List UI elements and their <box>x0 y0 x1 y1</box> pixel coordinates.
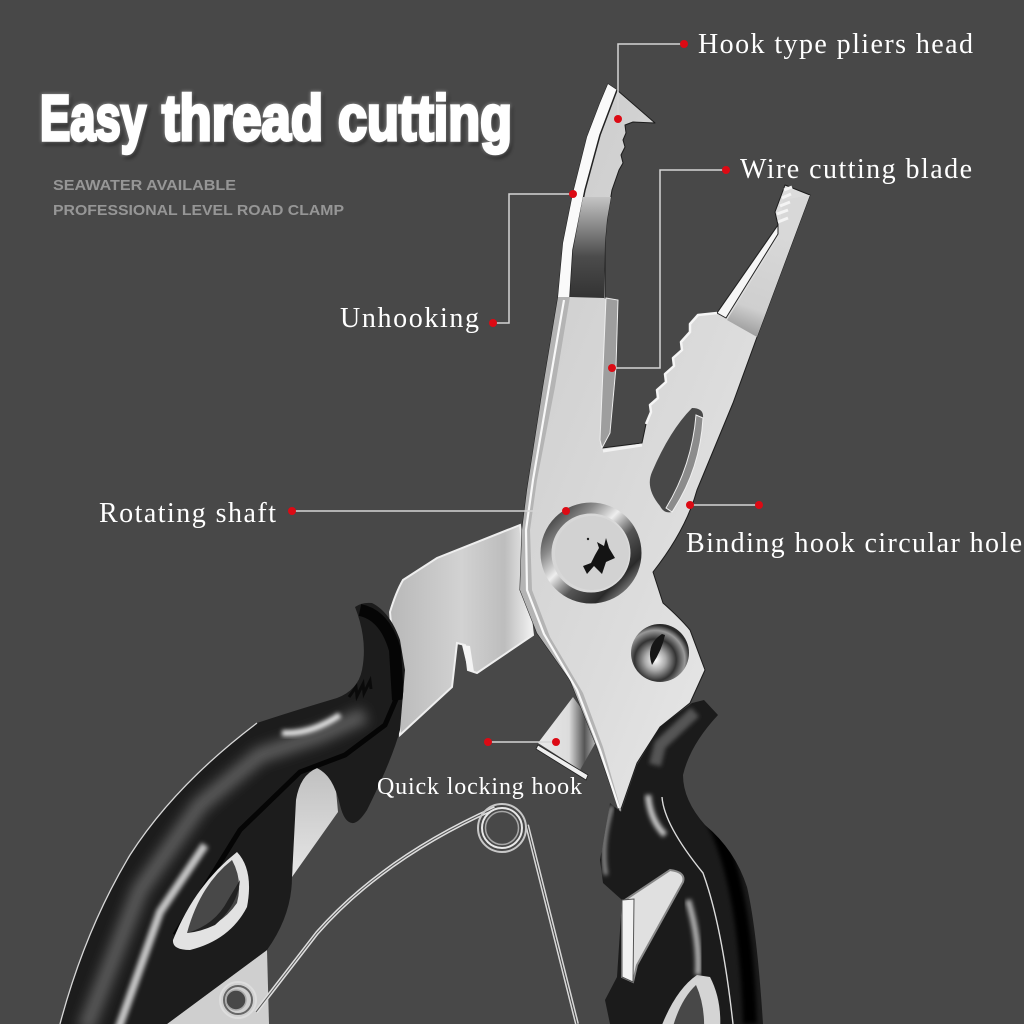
callout lines <box>292 44 759 742</box>
callout dots <box>288 40 763 746</box>
label: rotating shaft: Rotating shaft <box>99 498 276 529</box>
handle seam <box>175 690 400 935</box>
subtitle: SEAWATER AVAILABLE <box>53 177 236 194</box>
left black handle <box>50 595 420 1024</box>
left handle outline <box>60 723 257 1024</box>
grip notches <box>349 681 371 697</box>
rivet ball <box>631 624 689 682</box>
binding hook hole <box>650 408 703 512</box>
label: quick locking hook: Quick locking hook <box>377 774 582 800</box>
title: thread <box>164 85 325 157</box>
back blade sliver <box>600 298 618 448</box>
subtitle <box>53 177 344 219</box>
left chrome highlight <box>526 300 619 808</box>
right black handle <box>595 695 770 1024</box>
title: Easy <box>42 85 148 157</box>
subtitle: PROFESSIONAL LEVEL ROAD CLAMP <box>53 202 344 219</box>
mid highlight <box>648 795 665 835</box>
top jaw inner line <box>570 90 617 297</box>
top jaw white strip <box>558 84 617 297</box>
title: cutting <box>338 82 512 154</box>
steel strip <box>622 899 634 982</box>
label: hook type pliers head: Hook type pliers head <box>698 29 973 60</box>
right jaw blade <box>717 187 810 337</box>
label: wire cutting blade: Wire cutting blade <box>740 154 972 185</box>
quick lock tab <box>536 697 600 780</box>
right steel insert <box>622 870 683 982</box>
title: cutting <box>340 85 514 157</box>
main steel body <box>520 84 810 812</box>
handle opening ring <box>173 852 249 950</box>
serrated edge <box>646 313 717 424</box>
label: binding hook circular hole: Binding hook circular hole <box>686 528 1022 559</box>
steel base under left handle <box>167 950 269 1024</box>
right lobe shade <box>700 800 750 1024</box>
left chrome strip <box>520 297 621 812</box>
lower chrome opening <box>660 975 720 1024</box>
jaw pocket bottom edge <box>603 445 642 451</box>
plate notch tooth <box>462 645 474 672</box>
inner chrome arm <box>688 900 698 975</box>
pivot screw <box>546 508 636 598</box>
grip top <box>360 610 398 700</box>
thin light line <box>662 797 733 1024</box>
dark jaw gradient <box>570 197 611 298</box>
handle bright band <box>118 845 205 1024</box>
handle tube shading <box>85 715 365 1024</box>
steel wedge behind left handle <box>292 768 338 877</box>
grip highlight <box>282 715 340 733</box>
title: thread <box>162 82 323 154</box>
lower left plate <box>390 525 533 735</box>
left chrome edge <box>604 806 612 875</box>
spring wire <box>220 804 577 1024</box>
label: unhooking: Unhooking <box>340 303 479 334</box>
pliers <box>50 84 810 1024</box>
upper highlight band <box>655 712 695 765</box>
title: thread <box>162 82 323 154</box>
title: Easy <box>40 82 146 154</box>
title: cutting <box>338 82 512 154</box>
title <box>40 82 514 157</box>
title: Easy <box>40 82 146 154</box>
